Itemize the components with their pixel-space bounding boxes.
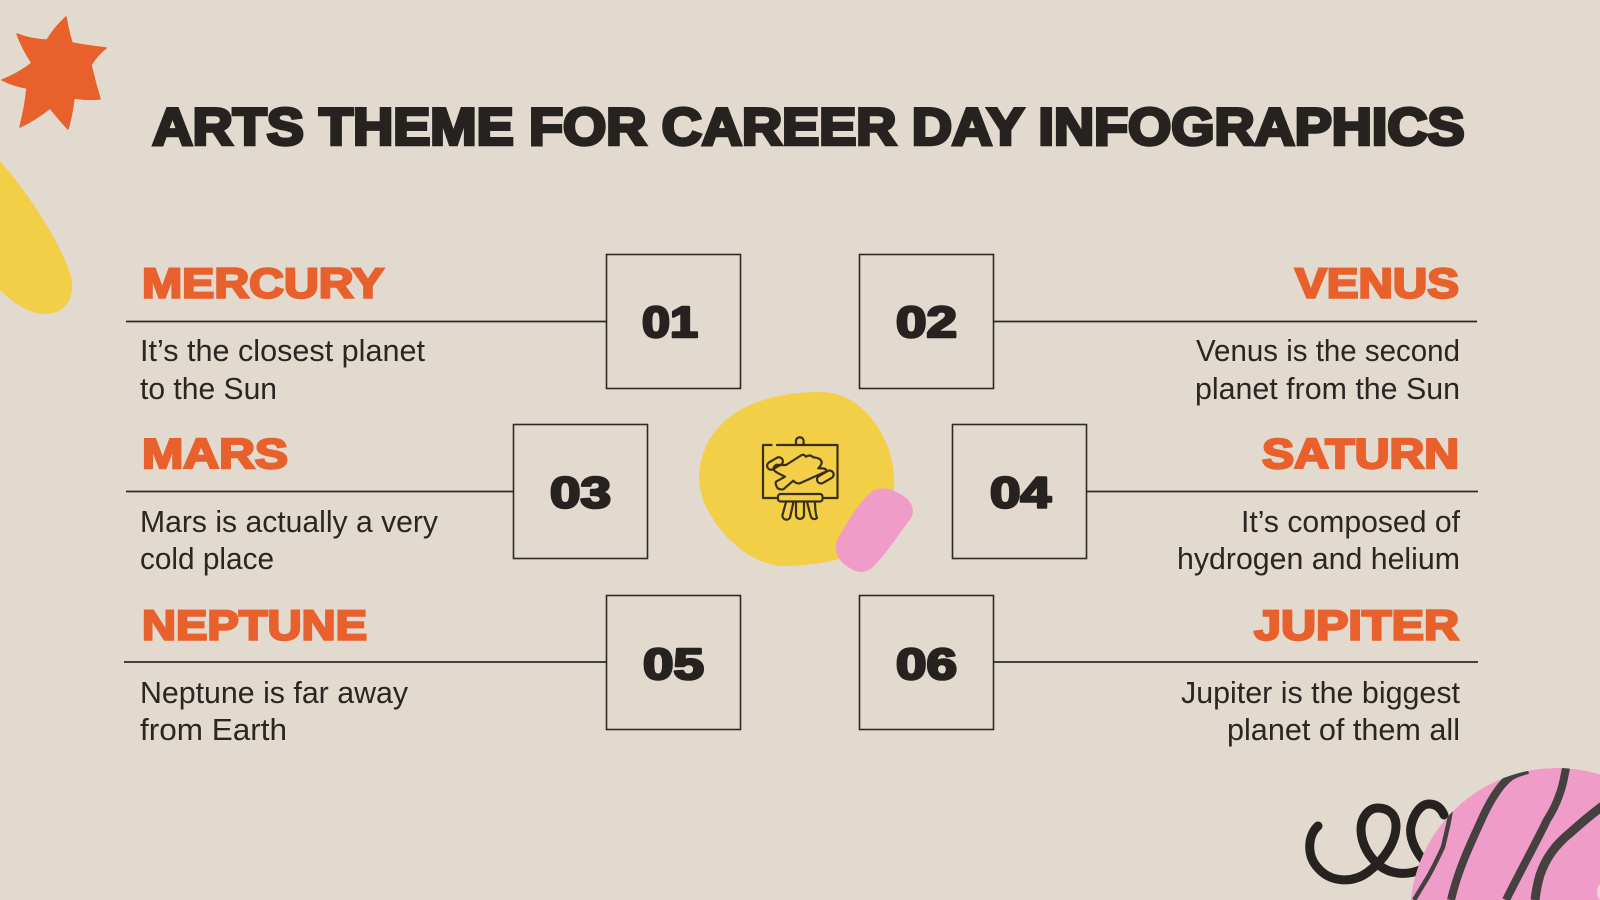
item 01: Mercury bbox=[126, 254, 740, 406]
description: Mars: Mars is actually a very bbox=[140, 504, 438, 539]
number box 01 bbox=[606, 254, 740, 388]
item 05: Neptune bbox=[124, 596, 740, 747]
decoration: pink striped circle bbox=[1411, 768, 1600, 900]
number box 04 bbox=[952, 424, 1086, 558]
number box 06 bbox=[860, 596, 994, 730]
item 04: Saturn bbox=[952, 424, 1478, 576]
number box 06: 06 bbox=[896, 640, 957, 689]
title: ARTS THEME FOR CAREER DAY INFOGRAPHICS bbox=[152, 98, 1464, 156]
heading: Neptune: NEPTUNE bbox=[142, 602, 367, 648]
description: Jupiter: planet of them all bbox=[1227, 712, 1460, 747]
description: Neptune: Neptune is far away bbox=[140, 675, 408, 710]
heading: Venus: VENUS bbox=[1295, 260, 1459, 306]
item 03: Mars bbox=[126, 424, 648, 576]
pink blob bbox=[836, 488, 913, 572]
heading: Mars: MARS bbox=[142, 430, 288, 477]
decoration: orange star bbox=[2, 17, 106, 129]
heading: Mercury: MERCURY bbox=[142, 260, 384, 306]
description: Venus bbox=[1195, 333, 1460, 406]
heading: Saturn: SATURN bbox=[1262, 430, 1459, 477]
number box 02 bbox=[860, 254, 994, 388]
item 06: Jupiter bbox=[860, 596, 1478, 747]
description: Mercury bbox=[140, 333, 425, 406]
description: Mars: cold place bbox=[140, 541, 274, 576]
center: yellow blob with easel icon bbox=[699, 392, 913, 572]
description: Mercury: to the Sun bbox=[140, 371, 277, 406]
description: Neptune: from Earth bbox=[140, 712, 287, 747]
item 02: Venus bbox=[860, 254, 1477, 406]
heading: Jupiter: JUPITER bbox=[1254, 602, 1459, 648]
description: Saturn: hydrogen and helium bbox=[1177, 541, 1460, 576]
description: Venus: Venus is the second bbox=[1196, 333, 1460, 368]
number box 03 bbox=[514, 424, 648, 558]
number box 02: 02 bbox=[896, 298, 957, 347]
description: Mercury: It’s the closest planet bbox=[140, 333, 425, 368]
description: Saturn bbox=[1177, 504, 1460, 576]
number box 05 bbox=[606, 596, 740, 730]
number box 05: 05 bbox=[643, 640, 704, 689]
number box 03: 03 bbox=[550, 468, 611, 518]
description: Mars bbox=[140, 504, 438, 576]
decoration: yellow blob bbox=[0, 161, 72, 314]
decoration: black squiggle bbox=[1310, 804, 1444, 880]
description: Neptune bbox=[140, 675, 408, 747]
number box 04: 04 bbox=[990, 468, 1052, 518]
description: Saturn: It’s composed of bbox=[1241, 504, 1460, 539]
description: Venus: planet from the Sun bbox=[1195, 371, 1460, 406]
icon: easel with painting bbox=[763, 437, 838, 520]
description: Jupiter: Jupiter is the biggest bbox=[1181, 675, 1460, 710]
number box 01: 01 bbox=[642, 298, 698, 347]
description: Jupiter bbox=[1181, 675, 1460, 747]
